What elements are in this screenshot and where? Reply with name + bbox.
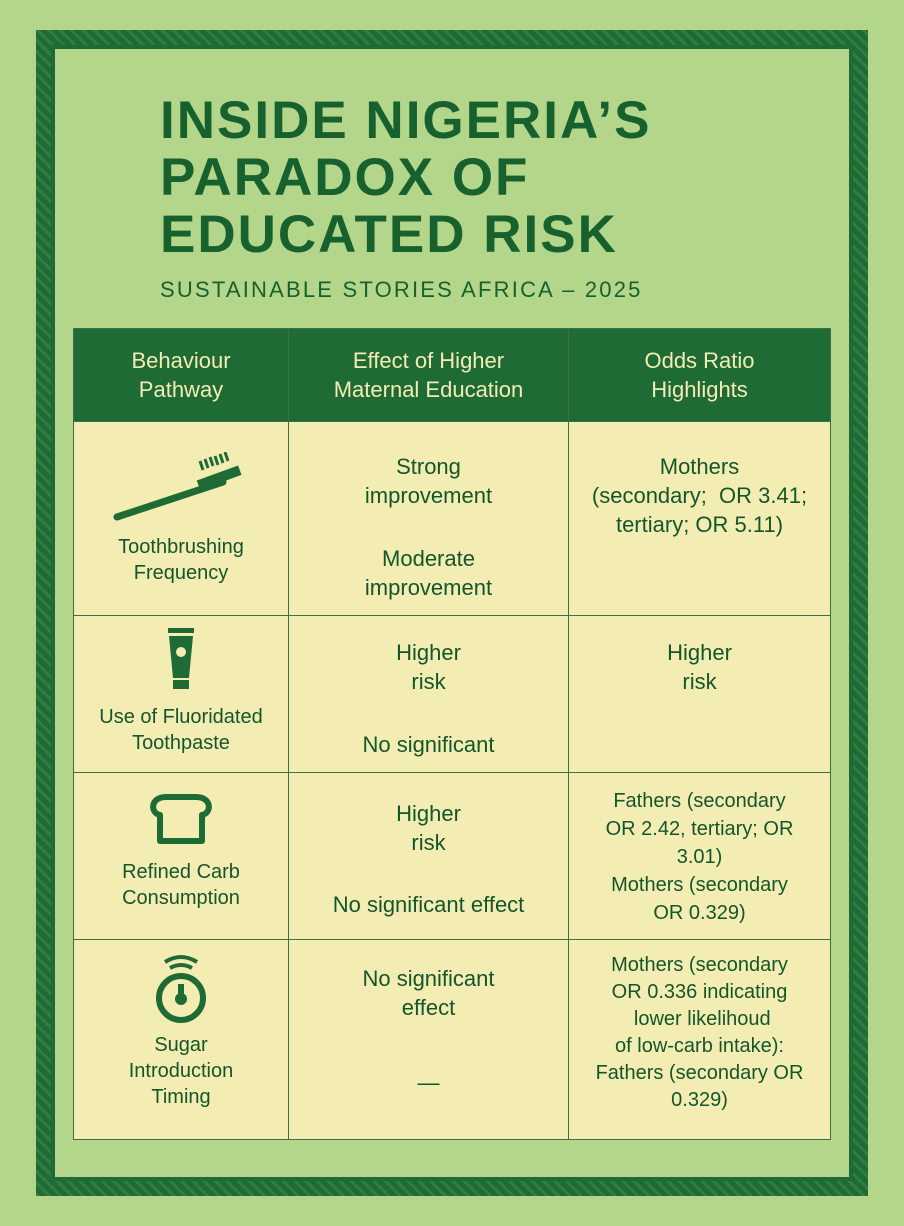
table: OR 2.42, tertiary; OR — [606, 818, 793, 840]
table: (secondary; OR 3.41; — [592, 483, 807, 508]
table: Higher — [667, 640, 732, 665]
table: risk — [411, 830, 446, 855]
table: No significant — [362, 966, 495, 991]
table: Strong — [396, 454, 461, 479]
table: Mothers (secondary — [611, 954, 788, 976]
table: OR 0.329) — [653, 902, 746, 924]
title: EDUCATED RISK — [160, 205, 618, 264]
table: Highlights — [651, 377, 748, 402]
table: 0.329) — [671, 1089, 728, 1111]
icon: bread — [150, 794, 212, 844]
icon: toothpaste tube — [168, 628, 194, 689]
title: INSIDE NIGERIA’S — [160, 91, 651, 150]
table: Fathers (secondary OR — [596, 1062, 803, 1084]
table: Sugar — [154, 1034, 208, 1056]
table: Fathers (secondary — [613, 790, 786, 812]
table: Effect of Higher — [353, 348, 504, 373]
table: No significant effect — [333, 892, 524, 917]
subtitle: SUSTAINABLE STORIES AFRICA – 2025 — [160, 277, 643, 302]
table: risk — [682, 669, 717, 694]
title — [160, 91, 651, 264]
table: Introduction — [129, 1060, 233, 1082]
table: Pathway — [139, 377, 223, 402]
table: Higher — [396, 801, 461, 826]
table: Refined Carb — [122, 861, 240, 883]
table: of low-carb intake): — [615, 1035, 784, 1057]
table: Odds Ratio — [644, 348, 755, 373]
table: Toothbrushing — [118, 536, 244, 558]
table: Moderate — [382, 546, 475, 571]
table: Toothpaste — [132, 732, 230, 754]
table: Higher — [396, 640, 461, 665]
table — [73, 328, 831, 1140]
table: OR 0.336 indicating — [612, 981, 787, 1003]
table: risk — [411, 669, 446, 694]
icon: timer — [156, 955, 206, 1023]
table: Consumption — [122, 887, 240, 909]
table: — — [418, 1070, 440, 1095]
table: improvement — [365, 575, 492, 600]
table: Mothers — [660, 454, 739, 479]
table: Mothers (secondary — [611, 874, 788, 896]
icon: toothbrush — [114, 452, 242, 520]
table: tertiary; OR 5.11) — [616, 512, 783, 537]
table: No significant — [362, 732, 495, 757]
table: Behaviour — [131, 348, 231, 373]
table: Timing — [151, 1086, 211, 1108]
table: Use of Fluoridated — [99, 706, 263, 728]
title: PARADOX OF — [160, 148, 529, 207]
table: improvement — [365, 483, 492, 508]
table: Frequency — [134, 562, 228, 584]
table: 3.01) — [677, 846, 722, 868]
table: Maternal Education — [334, 377, 523, 402]
table: lower likelihoud — [634, 1008, 771, 1030]
table: effect — [402, 995, 455, 1020]
